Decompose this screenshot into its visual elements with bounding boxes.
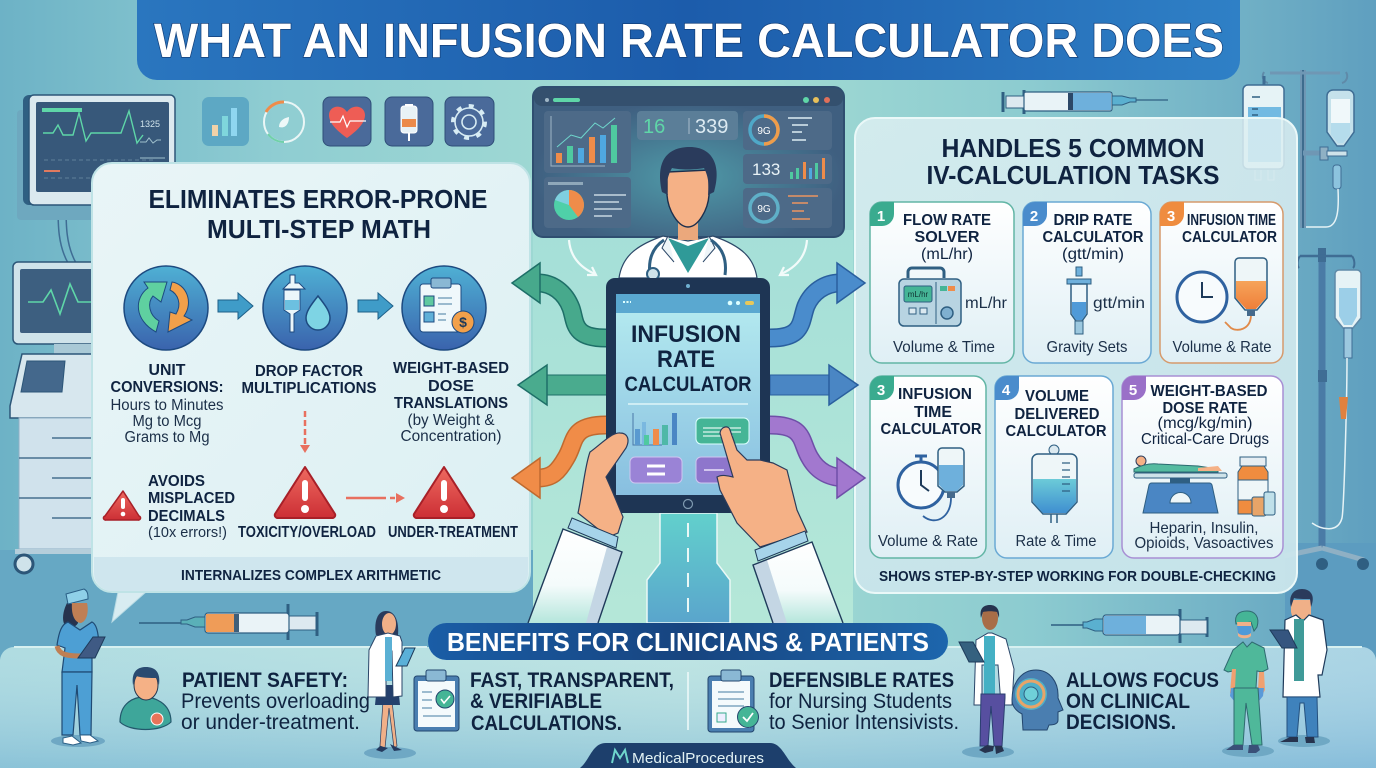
step 1 text: CONVERSIONS: — [110, 379, 224, 396]
monitor: lower — [13, 262, 103, 354]
dashed right arrow — [346, 493, 405, 503]
cart — [10, 354, 100, 573]
icon: clipboard with coin circle: $ — [459, 314, 467, 330]
tablet chart — [633, 413, 677, 445]
step 3 text: Concentration) — [400, 428, 502, 445]
step 2 text: MULTIPLICATIONS — [242, 380, 377, 397]
syringe: bottom right — [1051, 609, 1207, 643]
panel: eliminates error-prone math — [92, 163, 530, 622]
benefit 4 text: ALLOWS FOCUS — [1066, 669, 1219, 692]
card caption: Heparin, Insulin, — [1150, 520, 1258, 537]
arrow — [358, 293, 393, 319]
icon: clipboard with check — [414, 670, 459, 731]
card title: INFUSION — [898, 386, 972, 403]
hands and sleeves — [528, 427, 843, 623]
brand logo tab: MedicalProcedures — [632, 750, 764, 767]
pie panel — [544, 177, 631, 228]
card caption: Volume & Time — [893, 339, 995, 356]
icon: bar chart — [202, 97, 249, 146]
icon: gear — [445, 97, 494, 146]
benefit 4 text: DECISIONS. — [1066, 711, 1176, 734]
card title: DELIVERED — [1014, 406, 1100, 423]
card title: (mcg/kg/min) — [1158, 415, 1252, 432]
panel footer: INTERNALIZES COMPLEX ARITHMETIC — [181, 568, 441, 584]
icon: under-treatment warning — [414, 467, 474, 518]
card 2: drip rate calculator: 2 — [1030, 208, 1038, 225]
icon row — [202, 97, 494, 146]
title text: WHAT AN INFUSION RATE CALCULATOR DOES — [154, 15, 1224, 68]
card title: CALCULATOR — [1042, 229, 1144, 246]
warning labels: TOXICITY/OVERLOAD — [238, 524, 376, 541]
person: male clinician — [959, 605, 1014, 758]
syringe: top right — [1003, 90, 1168, 114]
icon: patient on scale — [1134, 456, 1227, 513]
ring tile 2: 9G — [757, 204, 771, 215]
panel heading: IV-CALCULATION TASKS — [926, 160, 1220, 190]
arrow — [218, 293, 253, 319]
card 1: flow rate solver — [870, 202, 1014, 363]
step 2 text — [242, 363, 377, 397]
card caption: Volume & Rate — [878, 533, 978, 550]
right hand — [717, 427, 807, 547]
avoids misplaced decimals text: AVOIDS — [148, 473, 205, 490]
unit label: gtt/min — [1093, 295, 1145, 312]
title banner — [137, 0, 1240, 80]
panel heading: HANDLES 5 COMMON — [942, 133, 1204, 163]
card title: CALCULATOR — [880, 421, 982, 438]
benefit 2 text — [470, 669, 674, 735]
number tile: 16 — [643, 116, 665, 138]
card 1: flow rate solver: 1 — [877, 208, 885, 225]
card 5: volume delivered calculator: 4 — [1002, 382, 1011, 399]
chart panel — [544, 111, 631, 173]
panel heading: ELIMINATES ERROR-PRONE — [148, 184, 488, 214]
step 1 text: UNIT — [148, 362, 186, 379]
person: surgeon — [1222, 611, 1274, 757]
ring tile 1: 9G — [757, 126, 771, 137]
card title — [1006, 388, 1107, 440]
avoids misplaced decimals text: (10x errors!) — [148, 524, 227, 541]
card title — [1182, 212, 1277, 246]
icon: clock and orange bag — [1177, 258, 1267, 330]
card caption — [1134, 520, 1274, 552]
iv bag behind panel — [1243, 76, 1284, 180]
benefit 2 text: CALCULATIONS. — [471, 712, 622, 735]
card title — [1141, 383, 1269, 448]
step 2 text: DROP FACTOR — [255, 363, 363, 380]
arrow: green straight left — [518, 365, 607, 405]
panel: benefits strip — [0, 647, 1376, 768]
icon: infusion pump — [899, 268, 961, 326]
step 1 text — [110, 362, 224, 446]
person: senior doctor — [1270, 589, 1330, 747]
card title: WEIGHT-BASED — [1150, 383, 1268, 400]
benefit 3 text: for Nursing Students — [769, 690, 952, 713]
icon: patient bust — [120, 667, 171, 730]
icon: dropper and drop circle — [263, 266, 347, 350]
arrow: blue wavy top-right — [770, 263, 865, 338]
benefit 4 text: ON CLINICAL — [1066, 690, 1190, 713]
panel heading: MULTI-STEP MATH — [207, 214, 431, 244]
step 3 text — [393, 360, 509, 445]
icon: medication bottles — [1238, 457, 1275, 516]
brand logo tab — [580, 743, 796, 768]
ring tile 2 — [743, 188, 832, 228]
card caption: Volume & Rate — [1172, 339, 1272, 356]
step 3 text: WEIGHT-BASED — [393, 360, 509, 377]
panel heading — [926, 133, 1220, 190]
tablet title: CALCULATOR — [624, 373, 752, 396]
benefit 1 text: Prevents overloading — [181, 690, 370, 713]
monitor: upper: 1325 — [140, 119, 160, 129]
panel heading — [148, 184, 488, 244]
arrow: green wavy top-left — [512, 263, 606, 338]
syringe: bottom left — [139, 604, 317, 640]
card caption: Gravity Sets — [1046, 339, 1128, 356]
number tile 133: 133 — [752, 160, 780, 179]
number tile — [637, 111, 738, 140]
card title — [880, 386, 982, 438]
arrow: orange wavy bottom-left — [512, 425, 606, 498]
card 4: infusion time calculator — [870, 376, 986, 558]
benefit 4 text — [1066, 669, 1219, 734]
icon: small warning — [103, 491, 141, 520]
iv pole lower — [1284, 248, 1369, 570]
central mint stripe — [533, 230, 853, 660]
icon: toxicity warning — [275, 467, 335, 518]
benefit 3 text: DEFENSIBLE RATES — [769, 669, 954, 692]
benefit 2 text: FAST, TRANSPARENT, — [470, 669, 674, 692]
card 4: infusion time calculator: 3 — [877, 382, 885, 399]
step 1 text: Mg to Mcg — [132, 413, 202, 430]
benefit 1 text — [181, 669, 370, 734]
card 6: weight-based dose rate: 5 — [1129, 382, 1137, 399]
tablet title: RATE — [657, 346, 715, 373]
right iv equipment — [1243, 70, 1369, 570]
card title: FLOW RATE — [903, 212, 991, 229]
panel footer: SHOWS STEP-BY-STEP WORKING FOR DOUBLE-CHECKING — [879, 569, 1276, 585]
card 3: infusion time calculator (orange): 3 — [1167, 208, 1175, 225]
icon: volume bag — [1032, 445, 1077, 523]
avoids misplaced decimals text — [148, 473, 235, 541]
dashed down arrow — [300, 411, 310, 453]
card 3: infusion time calculator (orange) — [1160, 202, 1283, 363]
card title: VOLUME — [1025, 388, 1089, 405]
tablet buttons — [630, 418, 749, 483]
tablet — [606, 278, 770, 513]
step 1 text: Grams to Mg — [124, 429, 210, 446]
curved arrows: dashboard to tablet — [569, 240, 807, 275]
icon: iv bag — [385, 97, 433, 146]
number tile: 339 — [695, 116, 728, 138]
card title: DRIP RATE — [1054, 212, 1133, 229]
benefit 3 text — [769, 669, 959, 734]
card title: (mL/hr) — [921, 246, 973, 263]
left medical equipment — [10, 95, 175, 573]
warning labels: UNDER-TREATMENT — [388, 524, 518, 541]
avoids misplaced decimals text: DECIMALS — [148, 508, 225, 525]
arrow: purple wavy bottom-right — [770, 425, 865, 498]
unit label: mL/hr — [965, 295, 1007, 312]
card caption: Rate & Time — [1016, 533, 1097, 550]
left sleeve — [528, 518, 622, 623]
card title — [903, 212, 991, 263]
benefit 1 text: or under-treatment. — [181, 711, 360, 734]
iv pole upper — [1263, 70, 1354, 228]
benefit divider — [687, 672, 689, 730]
icon: unit conversion circle — [124, 266, 208, 350]
step 3 text: TRANSLATIONS — [394, 395, 508, 412]
benefit 3 text: to Senior Intensivists. — [769, 711, 959, 734]
card title: TIME — [914, 404, 952, 421]
step 3 text: DOSE — [428, 378, 474, 395]
icon: heart — [323, 97, 371, 146]
card title: DOSE RATE — [1162, 400, 1248, 417]
person: female clinician — [364, 611, 416, 759]
icon: stopwatch and bag — [898, 448, 964, 520]
icon: infusion pump: mL/hr — [908, 290, 929, 299]
benefits heading pill: BENEFITS FOR CLINICIANS & PATIENTS — [447, 627, 929, 657]
right sleeve — [753, 531, 843, 623]
road — [647, 513, 730, 623]
card title: (gtt/min) — [1062, 246, 1124, 263]
card title: INFUSION TIME — [1187, 212, 1276, 229]
card title: CALCULATOR — [1006, 423, 1107, 440]
ring tile 1 — [743, 111, 832, 150]
card title — [1042, 212, 1144, 263]
benefit 1 text: PATIENT SAFETY: — [182, 669, 348, 692]
panel: handles 5 common tasks — [855, 118, 1297, 593]
dashboard screen — [533, 87, 844, 237]
card 6: weight-based dose rate — [1122, 376, 1283, 558]
step 1 text: Hours to Minutes — [110, 397, 224, 414]
avoids misplaced decimals text: MISPLACED — [148, 490, 235, 507]
icon: drip chamber — [1067, 267, 1091, 334]
left hand — [578, 433, 628, 537]
arrow: blue straight right — [770, 365, 858, 405]
icon: gauge — [264, 102, 304, 142]
benefit 2 text: & VERIFIABLE — [470, 690, 602, 713]
card caption: Opioids, Vasoactives — [1134, 535, 1274, 552]
card title: SOLVER — [914, 229, 980, 246]
tablet title — [624, 321, 752, 396]
warning labels — [238, 524, 518, 541]
doctor — [619, 147, 757, 280]
card 5: volume delivered calculator — [995, 376, 1113, 558]
card 2: drip rate calculator — [1023, 202, 1151, 363]
tablet title: INFUSION — [631, 321, 741, 348]
card title: Critical-Care Drugs — [1141, 431, 1269, 448]
floor — [0, 543, 1376, 660]
icon: clipboard with coin circle — [402, 266, 486, 350]
icon: head with target — [1012, 670, 1063, 730]
card title: CALCULATOR — [1182, 229, 1277, 246]
number tile 133 — [743, 154, 832, 184]
monitor: upper — [17, 95, 175, 263]
step 3 text: (by Weight & — [408, 412, 495, 429]
person: nurse — [51, 589, 105, 747]
icon: clipboard checklist — [708, 670, 758, 732]
